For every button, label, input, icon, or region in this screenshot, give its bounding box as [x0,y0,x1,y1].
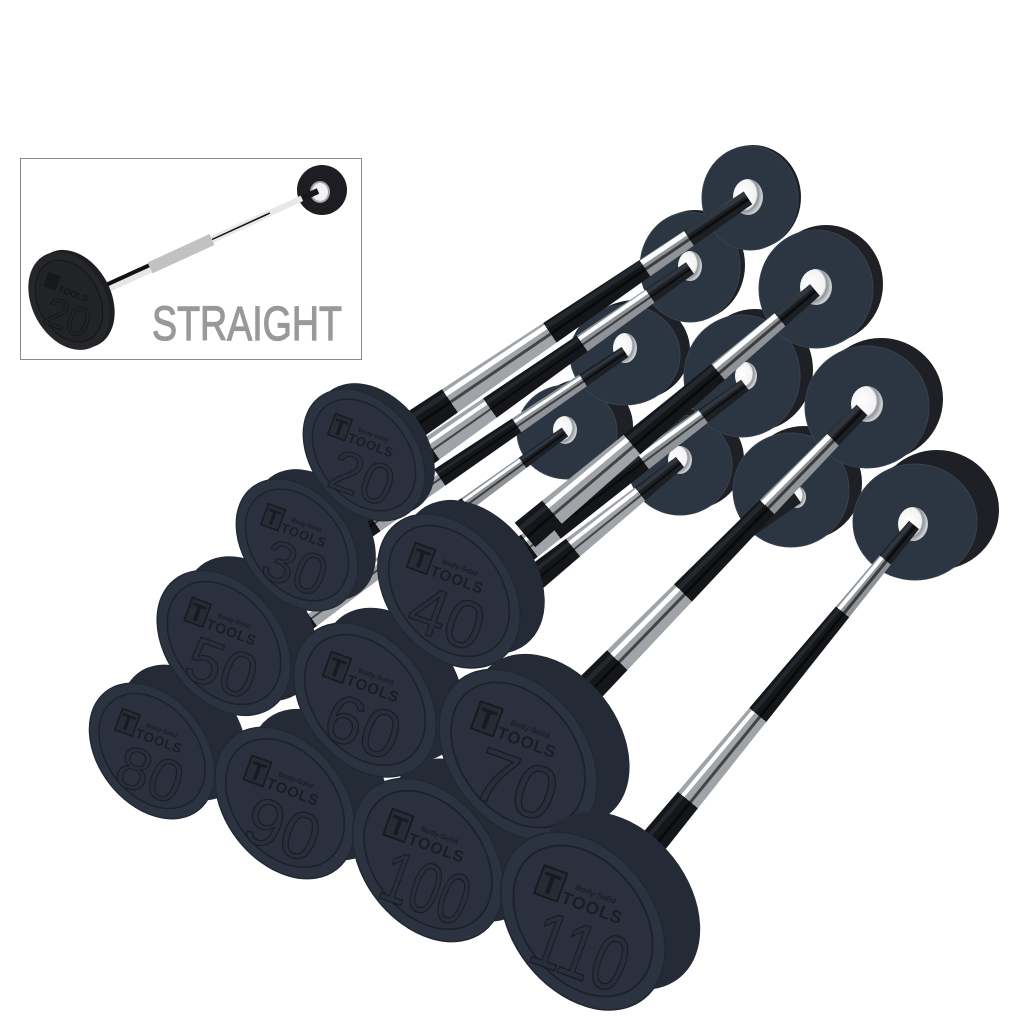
plate 110 [467,780,734,1028]
shaft 40 [515,284,820,547]
plate 80: 80 [107,732,193,817]
shaft 60 [517,380,749,560]
plate 30: TOOLS [279,520,329,550]
far plate 60 [684,309,813,437]
inset bar [106,191,318,288]
inset near plate: TOOLS [57,284,90,304]
shaft 50 [333,347,628,555]
plate 40 [348,472,574,696]
plate 20: Body-Solid [357,428,389,444]
plate 110: Body-Solid [574,883,617,906]
plate 100: 100 [370,836,481,942]
plate 30: T [262,504,284,532]
plate 80: T [116,708,138,737]
plate 30 [211,445,401,635]
plate 60: Body-Solid [357,668,394,687]
plate 70: T [473,702,501,738]
plate 20: 20 [321,437,403,520]
far plate 110 [853,450,999,580]
plate 100 [321,729,571,971]
barbell shafts [294,192,919,849]
plate 70: Body-Solid [509,718,551,740]
plate 90: Body-Solid [277,771,314,790]
inset near plate: 20 [38,288,97,347]
plate 80: TOOLS [133,726,184,756]
shaft 90 [527,457,684,588]
plate 30: 30 [254,527,336,610]
far plate 70 [805,338,943,468]
plate 110: T [536,866,564,903]
plate 50: 50 [176,622,268,714]
inset label: STRAIGHT [152,298,342,351]
plate 50: Body-Solid [217,612,252,631]
plate 70 [406,623,662,871]
plate 110: TOOLS [559,887,626,928]
plate 80: Body-Solid [145,722,178,740]
plate 90: 90 [235,783,330,878]
inset border [20,158,362,360]
inset far plate [297,165,347,215]
far plate 20 [702,145,801,250]
plate 100: TOOLS [405,830,467,867]
plate 20: T [329,414,351,442]
plate 70: 70 [462,731,569,838]
plate 40: Body-Solid [441,559,478,578]
shaft 110 [644,521,919,849]
far plate 40 [759,225,883,348]
plate 110: 110 [520,894,641,1010]
plate 100: Body-Solid [420,824,460,846]
far plate 50 [570,300,690,405]
far plate 30 [640,210,745,322]
near plates [64,359,734,1028]
far plate 100 [733,426,862,547]
plate 90: T [245,756,270,788]
inset panel: straight bar [12,158,361,364]
shaft 80 [294,428,568,634]
plate 50: TOOLS [204,617,258,650]
plate 90 [186,682,418,906]
plate 40: 40 [398,570,495,667]
plate 90: TOOLS [264,775,321,810]
plate 40: TOOLS [428,563,486,598]
far plates row [517,145,999,580]
plate 20: TOOLS [346,430,396,460]
plate 50 [129,530,345,741]
plate 100: T [385,808,412,843]
plate 60: T [324,653,349,685]
shaft 30 [392,262,694,482]
inset near plate [12,236,131,364]
far plate 90 [628,409,744,515]
plate 70: TOOLS [494,723,559,762]
plate 20 [278,359,460,545]
shaft 100 [750,497,797,530]
plate 60: TOOLS [344,672,402,707]
plate 40: T [408,544,433,576]
far plate 80 [517,379,633,479]
shaft 70 [579,405,867,698]
plate 50: T [186,598,209,629]
plate 30: Body-Solid [290,518,322,534]
plate 60: 60 [314,679,411,776]
shaft 20 [402,192,752,440]
plate 60 [264,580,494,805]
plate 80 [64,640,272,843]
